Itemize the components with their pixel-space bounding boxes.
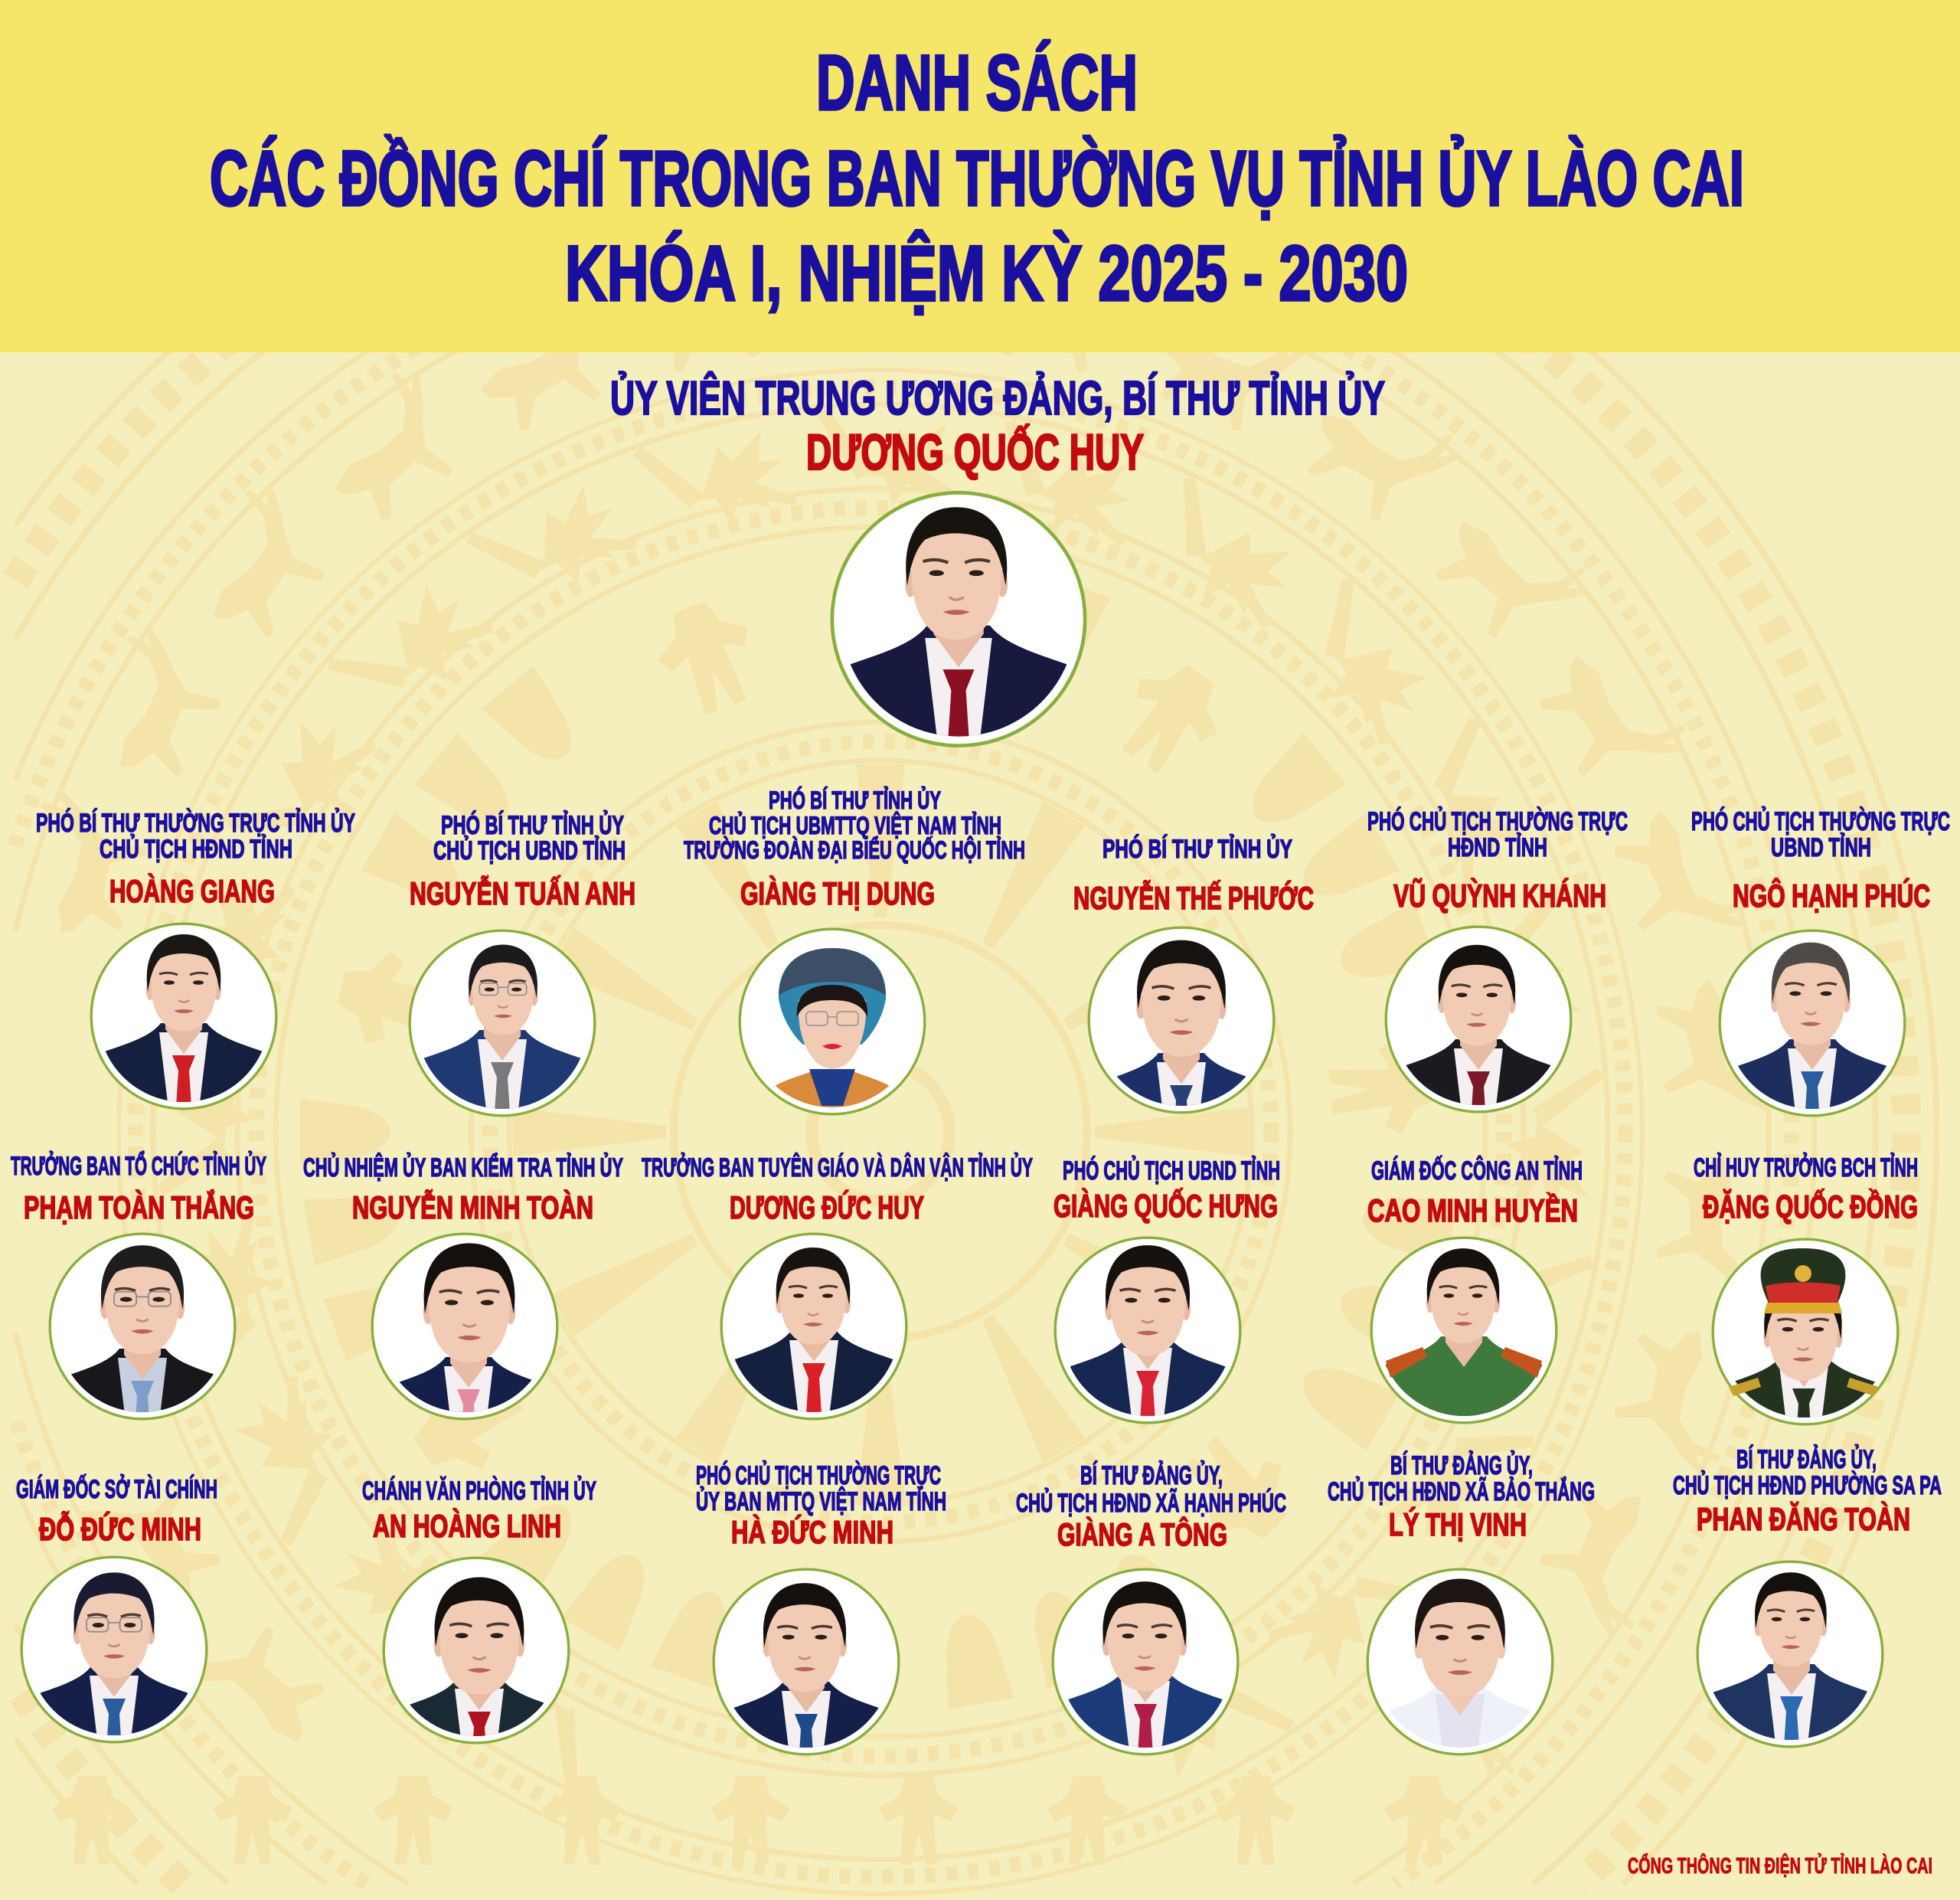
role: CHÁNH VĂN PHÒNG TỈNH ỦY	[362, 1477, 596, 1506]
role	[696, 1461, 946, 1516]
member: Lý Thị Vinh	[1328, 1451, 1595, 1803]
role: TRƯỞNG BAN TỔ CHỨC TỈNH ỦY	[11, 1152, 266, 1181]
portrait	[1697, 1562, 1883, 1782]
name: LÝ THỊ VINH	[1389, 1506, 1527, 1542]
role: BÍ THƯ ĐẢNG ỦY,	[1736, 1445, 1877, 1474]
role	[1016, 1461, 1286, 1518]
portrait	[1386, 927, 1571, 1157]
portrait	[1053, 1569, 1238, 1790]
role	[36, 809, 355, 864]
portrait	[721, 1234, 906, 1449]
role: TRƯỜNG ĐOÀN ĐẠI BIỂU QUỐC HỘI TỈNH	[684, 836, 1025, 864]
role: TRƯỞNG BAN TUYÊN GIÁO VÀ DÂN VẬN TỈNH ỦY	[642, 1153, 1033, 1182]
role: CHỦ TỊCH HĐND TỈNH	[100, 835, 292, 864]
name: GIÀNG A TÔNG	[1057, 1516, 1227, 1552]
role	[1673, 1445, 1942, 1500]
name: HOÀNG GIANG	[109, 873, 275, 909]
role	[433, 811, 626, 865]
role: GIÁM ĐỐC SỞ TÀI CHÍNH	[16, 1474, 217, 1504]
role: PHÓ CHỦ TỊCH THƯỜNG TRỰC	[1367, 807, 1628, 836]
member: Nguyễn Minh Toàn	[303, 1153, 623, 1475]
member: Dương Quốc Huy	[610, 372, 1385, 786]
name: NGUYỄN TUẤN ANH	[410, 875, 635, 911]
role: GIÁM ĐỐC CÔNG AN TỈNH	[1371, 1156, 1583, 1185]
role: UBND TỈNH	[1771, 833, 1871, 862]
name: secretary: DƯƠNG QUỐC HUY	[806, 423, 1144, 480]
role	[1367, 807, 1628, 862]
portrait	[1367, 1569, 1553, 1803]
title	[210, 39, 1744, 317]
portrait	[1713, 1239, 1898, 1474]
role: CHỦ TỊCH HĐND XÃ HẠNH PHÚC	[1016, 1489, 1286, 1518]
member: Nguyễn Tuấn Anh	[410, 811, 635, 1148]
member: An Hoàng Linh	[362, 1477, 596, 1797]
role: CHỦ TỊCH UBND TỈNH	[433, 836, 626, 865]
portrait	[50, 1234, 235, 1467]
name: CAO MINH HUYỀN	[1367, 1192, 1578, 1228]
title: DANH SÁCH	[816, 39, 1138, 126]
role: BÍ THƯ ĐẢNG ỦY,	[1390, 1451, 1533, 1480]
portrait: secretary	[830, 491, 1087, 747]
member: Hoàng Giang	[36, 809, 355, 1141]
role	[1691, 807, 1950, 862]
name: AN HOÀNG LINH	[373, 1508, 561, 1544]
member: Phan Đăng Toàn	[1673, 1445, 1942, 1782]
role: PHÓ BÍ THƯ THƯỜNG TRỰC TỈNH ỦY	[36, 809, 355, 838]
role	[1328, 1451, 1595, 1506]
name: GIÀNG THỊ DUNG	[740, 875, 935, 911]
title: KHÓA I, NHIỆM KỲ 2025 - 2030	[565, 230, 1408, 317]
role: HĐND TỈNH	[1448, 833, 1547, 862]
member: Ngô Hạnh Phúc	[1691, 807, 1950, 1157]
portrait	[740, 929, 925, 1121]
role: BÍ THƯ ĐẢNG ỦY,	[1080, 1461, 1223, 1490]
portrait	[1089, 927, 1274, 1171]
member: Hà Đức Minh	[696, 1461, 946, 1800]
name: ĐỖ ĐỨC MINH	[39, 1510, 201, 1547]
member: Nguyễn Thế Phước	[1073, 835, 1314, 1171]
name: NGUYỄN MINH TOÀN	[352, 1189, 593, 1225]
name: VŨ QUỲNH KHÁNH	[1393, 877, 1606, 914]
role: secretary: ỦY VIÊN TRUNG ƯƠNG ĐẢNG, BÍ THƯ TỈNH ỦY	[610, 372, 1385, 425]
name: NGUYỄN THẾ PHƯỚC	[1073, 879, 1314, 916]
member: Đỗ Đức Minh	[16, 1474, 217, 1784]
member: Đặng Quốc Đồng	[1694, 1153, 1918, 1474]
name: GIÀNG QUỐC HƯNG	[1054, 1187, 1278, 1224]
portrait	[1371, 1238, 1557, 1454]
role: ỦY BAN MTTQ VIỆT NAM TỈNH	[696, 1487, 946, 1516]
role: PHÓ BÍ THƯ TỈNH ỦY	[1102, 835, 1292, 864]
portrait	[21, 1557, 207, 1784]
member: Dương Đức Huy	[642, 1153, 1033, 1449]
name: DƯƠNG ĐỨC HUY	[730, 1189, 924, 1225]
member: Phạm Toàn Thắng	[11, 1152, 266, 1467]
role: CHỦ TỊCH UBMTTQ VIỆT NAM TỈNH	[709, 812, 1001, 839]
portrait	[1055, 1238, 1240, 1457]
portrait	[384, 1558, 569, 1797]
header band	[0, 0, 1960, 352]
role: PHÓ CHỦ TỊCH THƯỜNG TRỰC	[696, 1461, 941, 1490]
member: Vũ Quỳnh Khánh	[1367, 807, 1628, 1157]
role	[684, 786, 1025, 864]
role: CHỦ TỊCH HĐND XÃ BẢO THẮNG	[1328, 1477, 1595, 1506]
member: Giàng Quốc Hưng	[1054, 1156, 1280, 1457]
name: HÀ ĐỨC MINH	[731, 1513, 893, 1550]
role: PHÓ CHỦ TỊCH UBND TỈNH	[1063, 1156, 1280, 1185]
portrait	[91, 924, 276, 1141]
role: PHÓ BÍ THƯ TỈNH ỦY	[441, 811, 624, 840]
portrait	[714, 1569, 899, 1800]
member: Giàng A Tông	[1016, 1461, 1286, 1790]
portrait	[372, 1234, 557, 1475]
member: Giàng Thị Dung	[684, 786, 1025, 1121]
portrait	[1720, 930, 1905, 1157]
portrait	[410, 930, 595, 1148]
role: CHỦ NHIỆM ỦY BAN KIỂM TRA TỈNH ỦY	[303, 1153, 623, 1182]
role: PHÓ BÍ THƯ TỈNH ỦY	[769, 786, 941, 814]
name: PHẠM TOÀN THẮNG	[24, 1189, 254, 1225]
member: Cao Minh Huyền	[1367, 1156, 1583, 1454]
